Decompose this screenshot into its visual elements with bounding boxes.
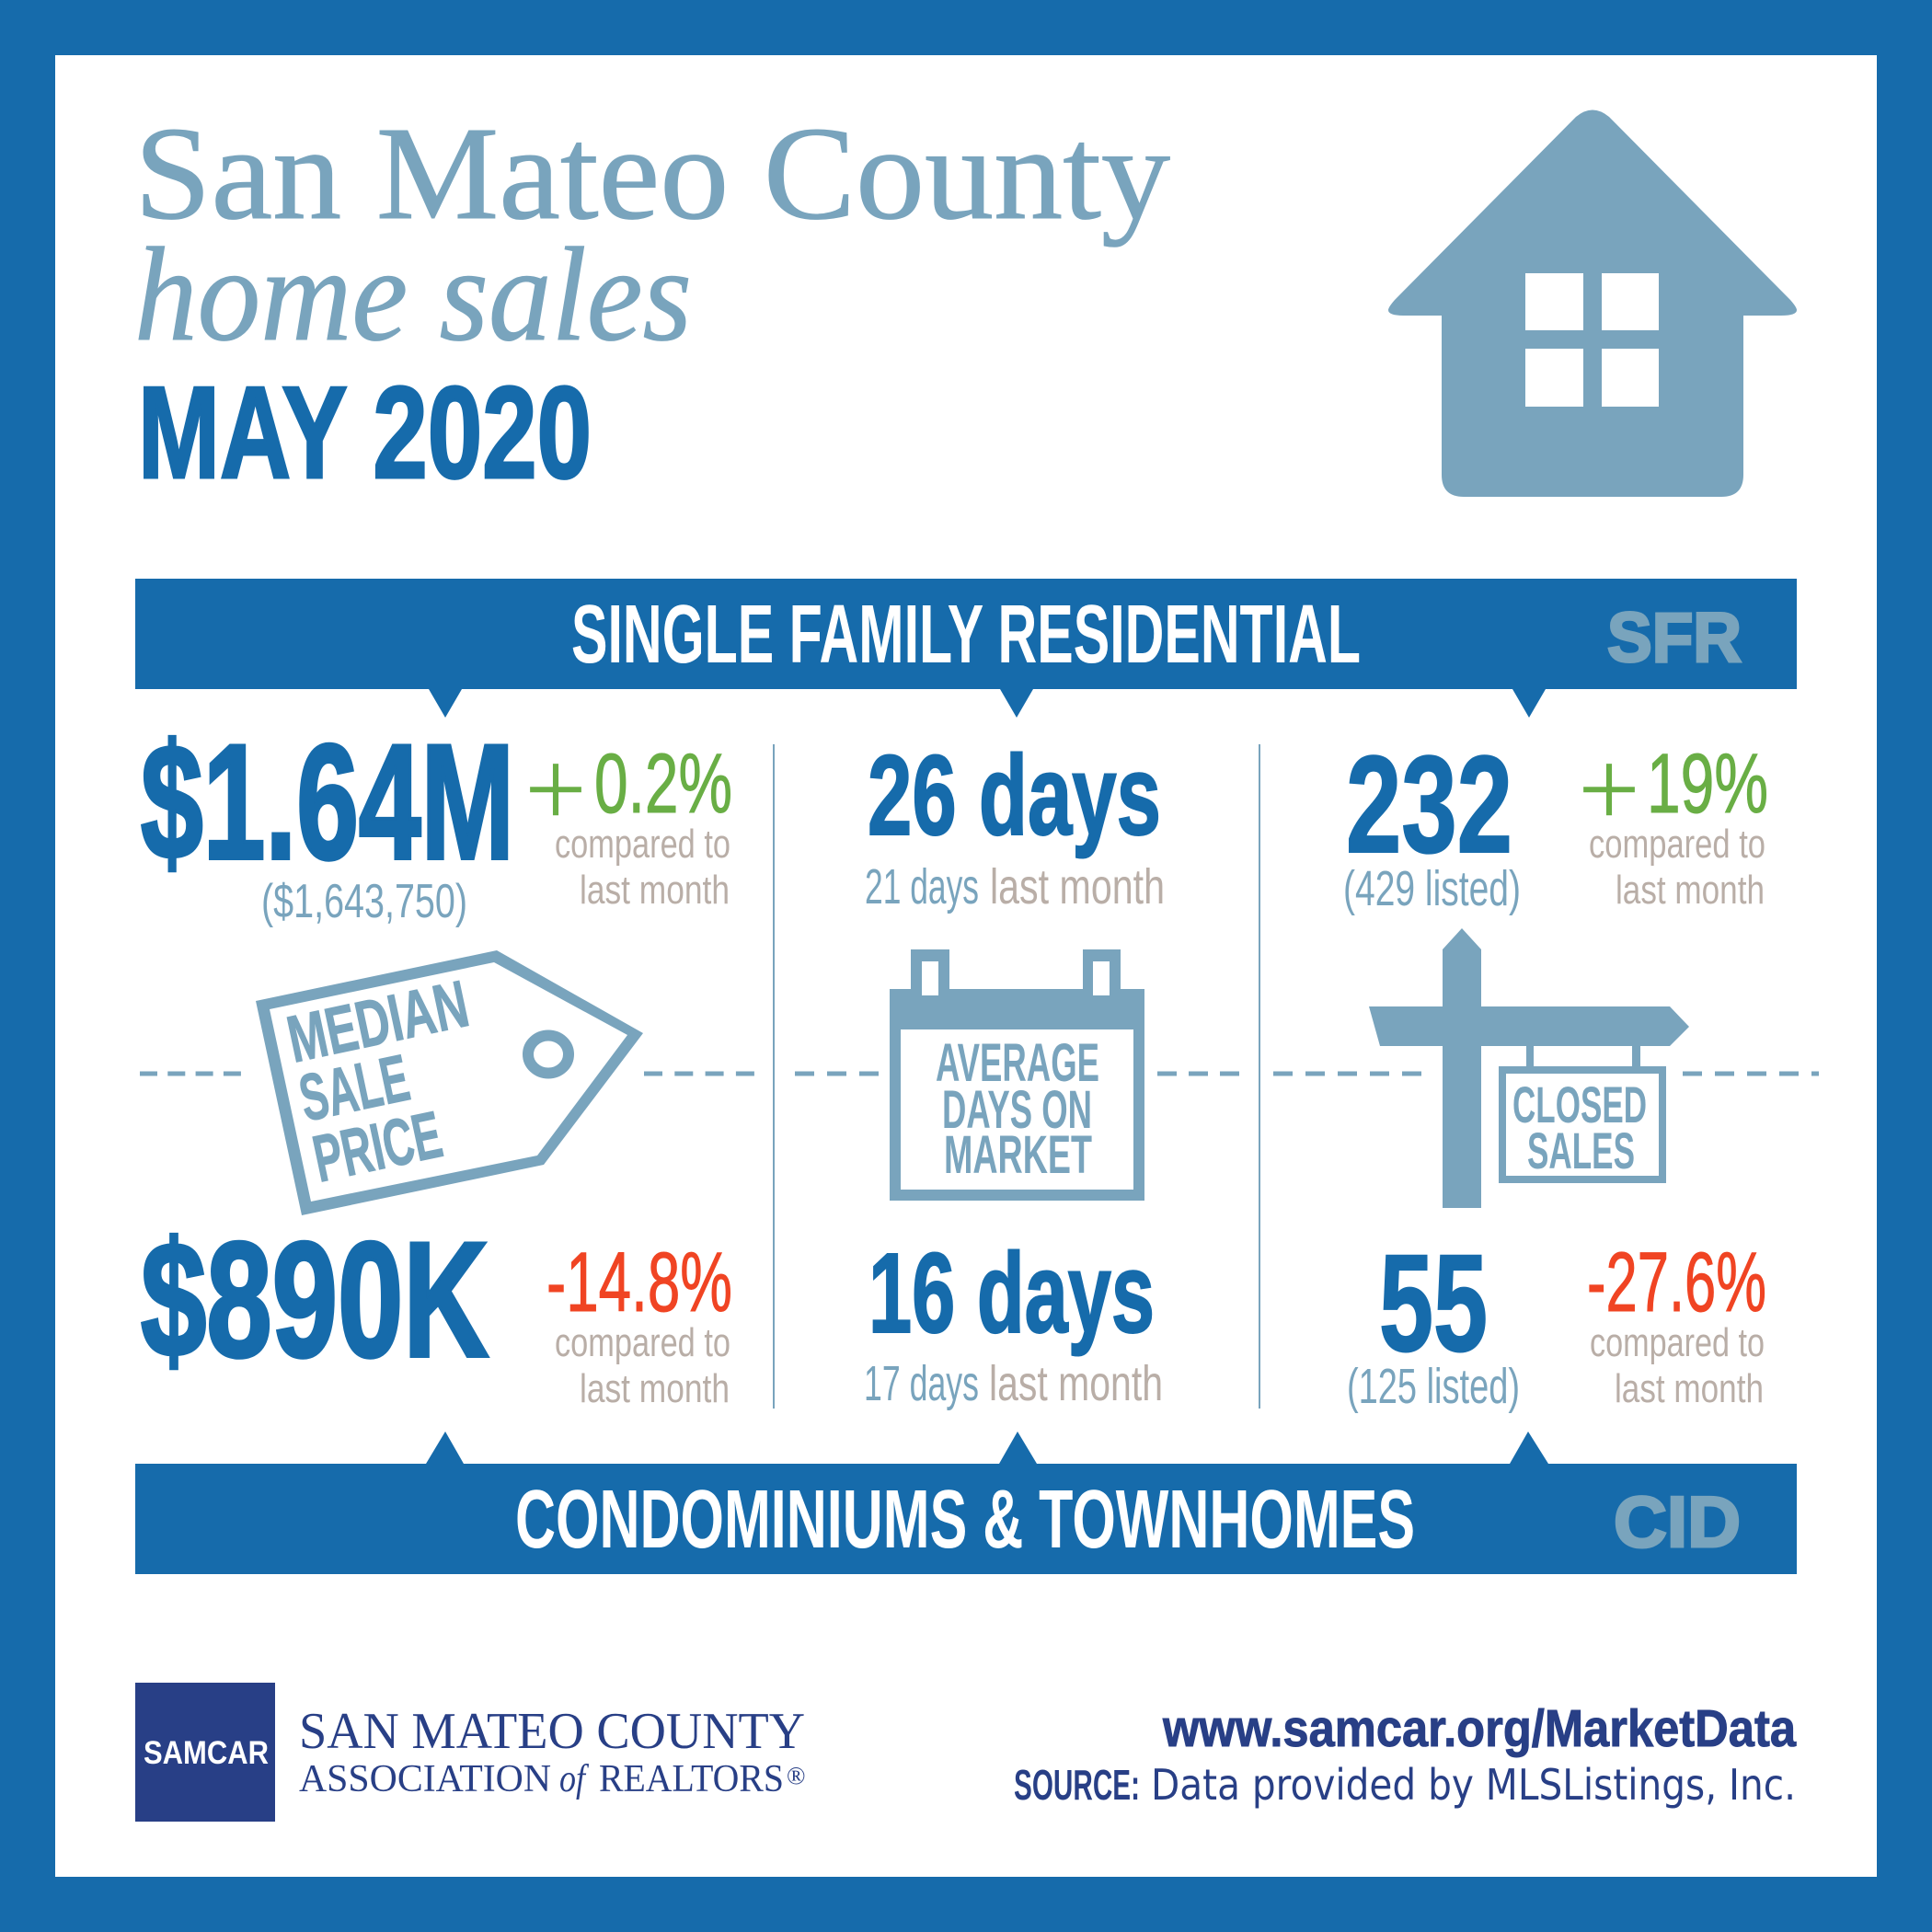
SFR days comparison xyxy=(865,859,1165,914)
SFR price comparison note: compared to xyxy=(555,822,730,867)
banner: single family residential xyxy=(135,579,1797,718)
SFR days comparison: last month xyxy=(990,859,1165,914)
logo: SAMCAR: SAMCAR xyxy=(144,1735,269,1771)
icon: calendar xyxy=(890,949,1144,1201)
panel: average days on market xyxy=(864,733,1165,1411)
panel: closed sales xyxy=(1343,727,1768,1414)
icon: price tag: MEDIAN xyxy=(282,967,475,1077)
panel: median sale price xyxy=(141,710,732,1411)
SFR price change: 0.2% xyxy=(594,737,732,831)
CID price comparison note: last month xyxy=(580,1366,730,1411)
banner abbreviation: SFR: SFR xyxy=(1607,599,1742,677)
association name: ASSOCIATION xyxy=(299,1758,551,1800)
banner abbreviation: CID: CID xyxy=(1614,1481,1741,1562)
SFR days value: 26 days xyxy=(868,733,1161,859)
SFR exact price: ($1,643,750) xyxy=(261,875,467,928)
association name: ® xyxy=(787,1762,806,1789)
title line: May 2020: MAY 2020 xyxy=(138,360,592,506)
CID sales value: 55 xyxy=(1379,1225,1488,1380)
title xyxy=(134,100,1170,506)
association name: SAN MATEO COUNTY xyxy=(299,1703,805,1760)
website link: www.samcar.org/MarketData xyxy=(1162,1699,1797,1758)
logo: SAMCAR xyxy=(135,1683,275,1822)
CID sales comparison note: last month xyxy=(1615,1366,1764,1411)
icon: calendar: AVERAGE xyxy=(936,1033,1099,1093)
icon: sign post: SALES xyxy=(1527,1121,1635,1179)
SFR price change: + xyxy=(523,727,588,850)
column dividers xyxy=(773,744,1260,1409)
CID sales comparison note xyxy=(1590,1320,1765,1411)
SFR sales change: + xyxy=(1577,727,1641,850)
SFR price change xyxy=(523,727,732,850)
CID price comparison note: compared to xyxy=(555,1320,730,1365)
SFR days comparison: 21 days xyxy=(865,859,979,914)
CID listed count: (125 listed) xyxy=(1347,1359,1520,1414)
CID sales comparison note: compared to xyxy=(1590,1320,1765,1365)
SFR listed count: (429 listed) xyxy=(1343,861,1521,916)
source note: Data provided by MLSListings, Inc. xyxy=(1151,1760,1796,1810)
CID days value: 16 days xyxy=(868,1231,1155,1357)
icon: calendar: MARKET xyxy=(944,1125,1092,1185)
icon: price tag: PRICE xyxy=(307,1098,448,1197)
SFR price comparison note: last month xyxy=(580,868,730,913)
association name: of xyxy=(559,1758,590,1800)
CID price value: $890K xyxy=(141,1208,489,1391)
icon: price tag xyxy=(256,950,643,1215)
source note: SOURCE: xyxy=(1014,1761,1140,1809)
SFR price comparison note xyxy=(555,822,730,913)
CID price change: -14.8% xyxy=(546,1236,732,1329)
icon: sign post: CLOSED xyxy=(1512,1075,1647,1133)
title line: home sales: home sales xyxy=(134,220,692,369)
CID price comparison note xyxy=(555,1320,730,1411)
banner: condominiums and townhomes xyxy=(135,1432,1797,1574)
CID days comparison: 17 days xyxy=(864,1356,979,1411)
SFR sales comparison note: last month xyxy=(1616,868,1765,913)
CID days comparison: last month xyxy=(989,1356,1163,1411)
banner heading: CID full name: CONDOMINIUMS & TOWNHOMES xyxy=(515,1474,1415,1566)
SFR sales comparison note xyxy=(1589,822,1765,913)
CID days comparison xyxy=(864,1356,1163,1411)
SFR sales value: 232 xyxy=(1346,727,1512,881)
dashed guide line xyxy=(140,1071,1819,1076)
SFR sales comparison note: compared to xyxy=(1589,822,1765,867)
association name: REALTORS xyxy=(599,1758,784,1800)
CID sales change: -27.6% xyxy=(1587,1236,1766,1329)
icon: house xyxy=(1388,110,1797,497)
icon: price tag: SALE xyxy=(293,1041,416,1136)
SFR sales change xyxy=(1577,727,1768,850)
SFR price value: $1.64M xyxy=(141,710,514,893)
icon: calendar: DAYS ON xyxy=(942,1080,1092,1140)
title line: San Mateo County: San Mateo County xyxy=(134,100,1170,247)
banner heading: SFR full name: SINGLE FAMILY RESIDENTIAL xyxy=(571,589,1361,681)
association name xyxy=(299,1703,806,1800)
icon: sign post xyxy=(1369,928,1689,1208)
SFR sales change: 19% xyxy=(1647,737,1768,831)
